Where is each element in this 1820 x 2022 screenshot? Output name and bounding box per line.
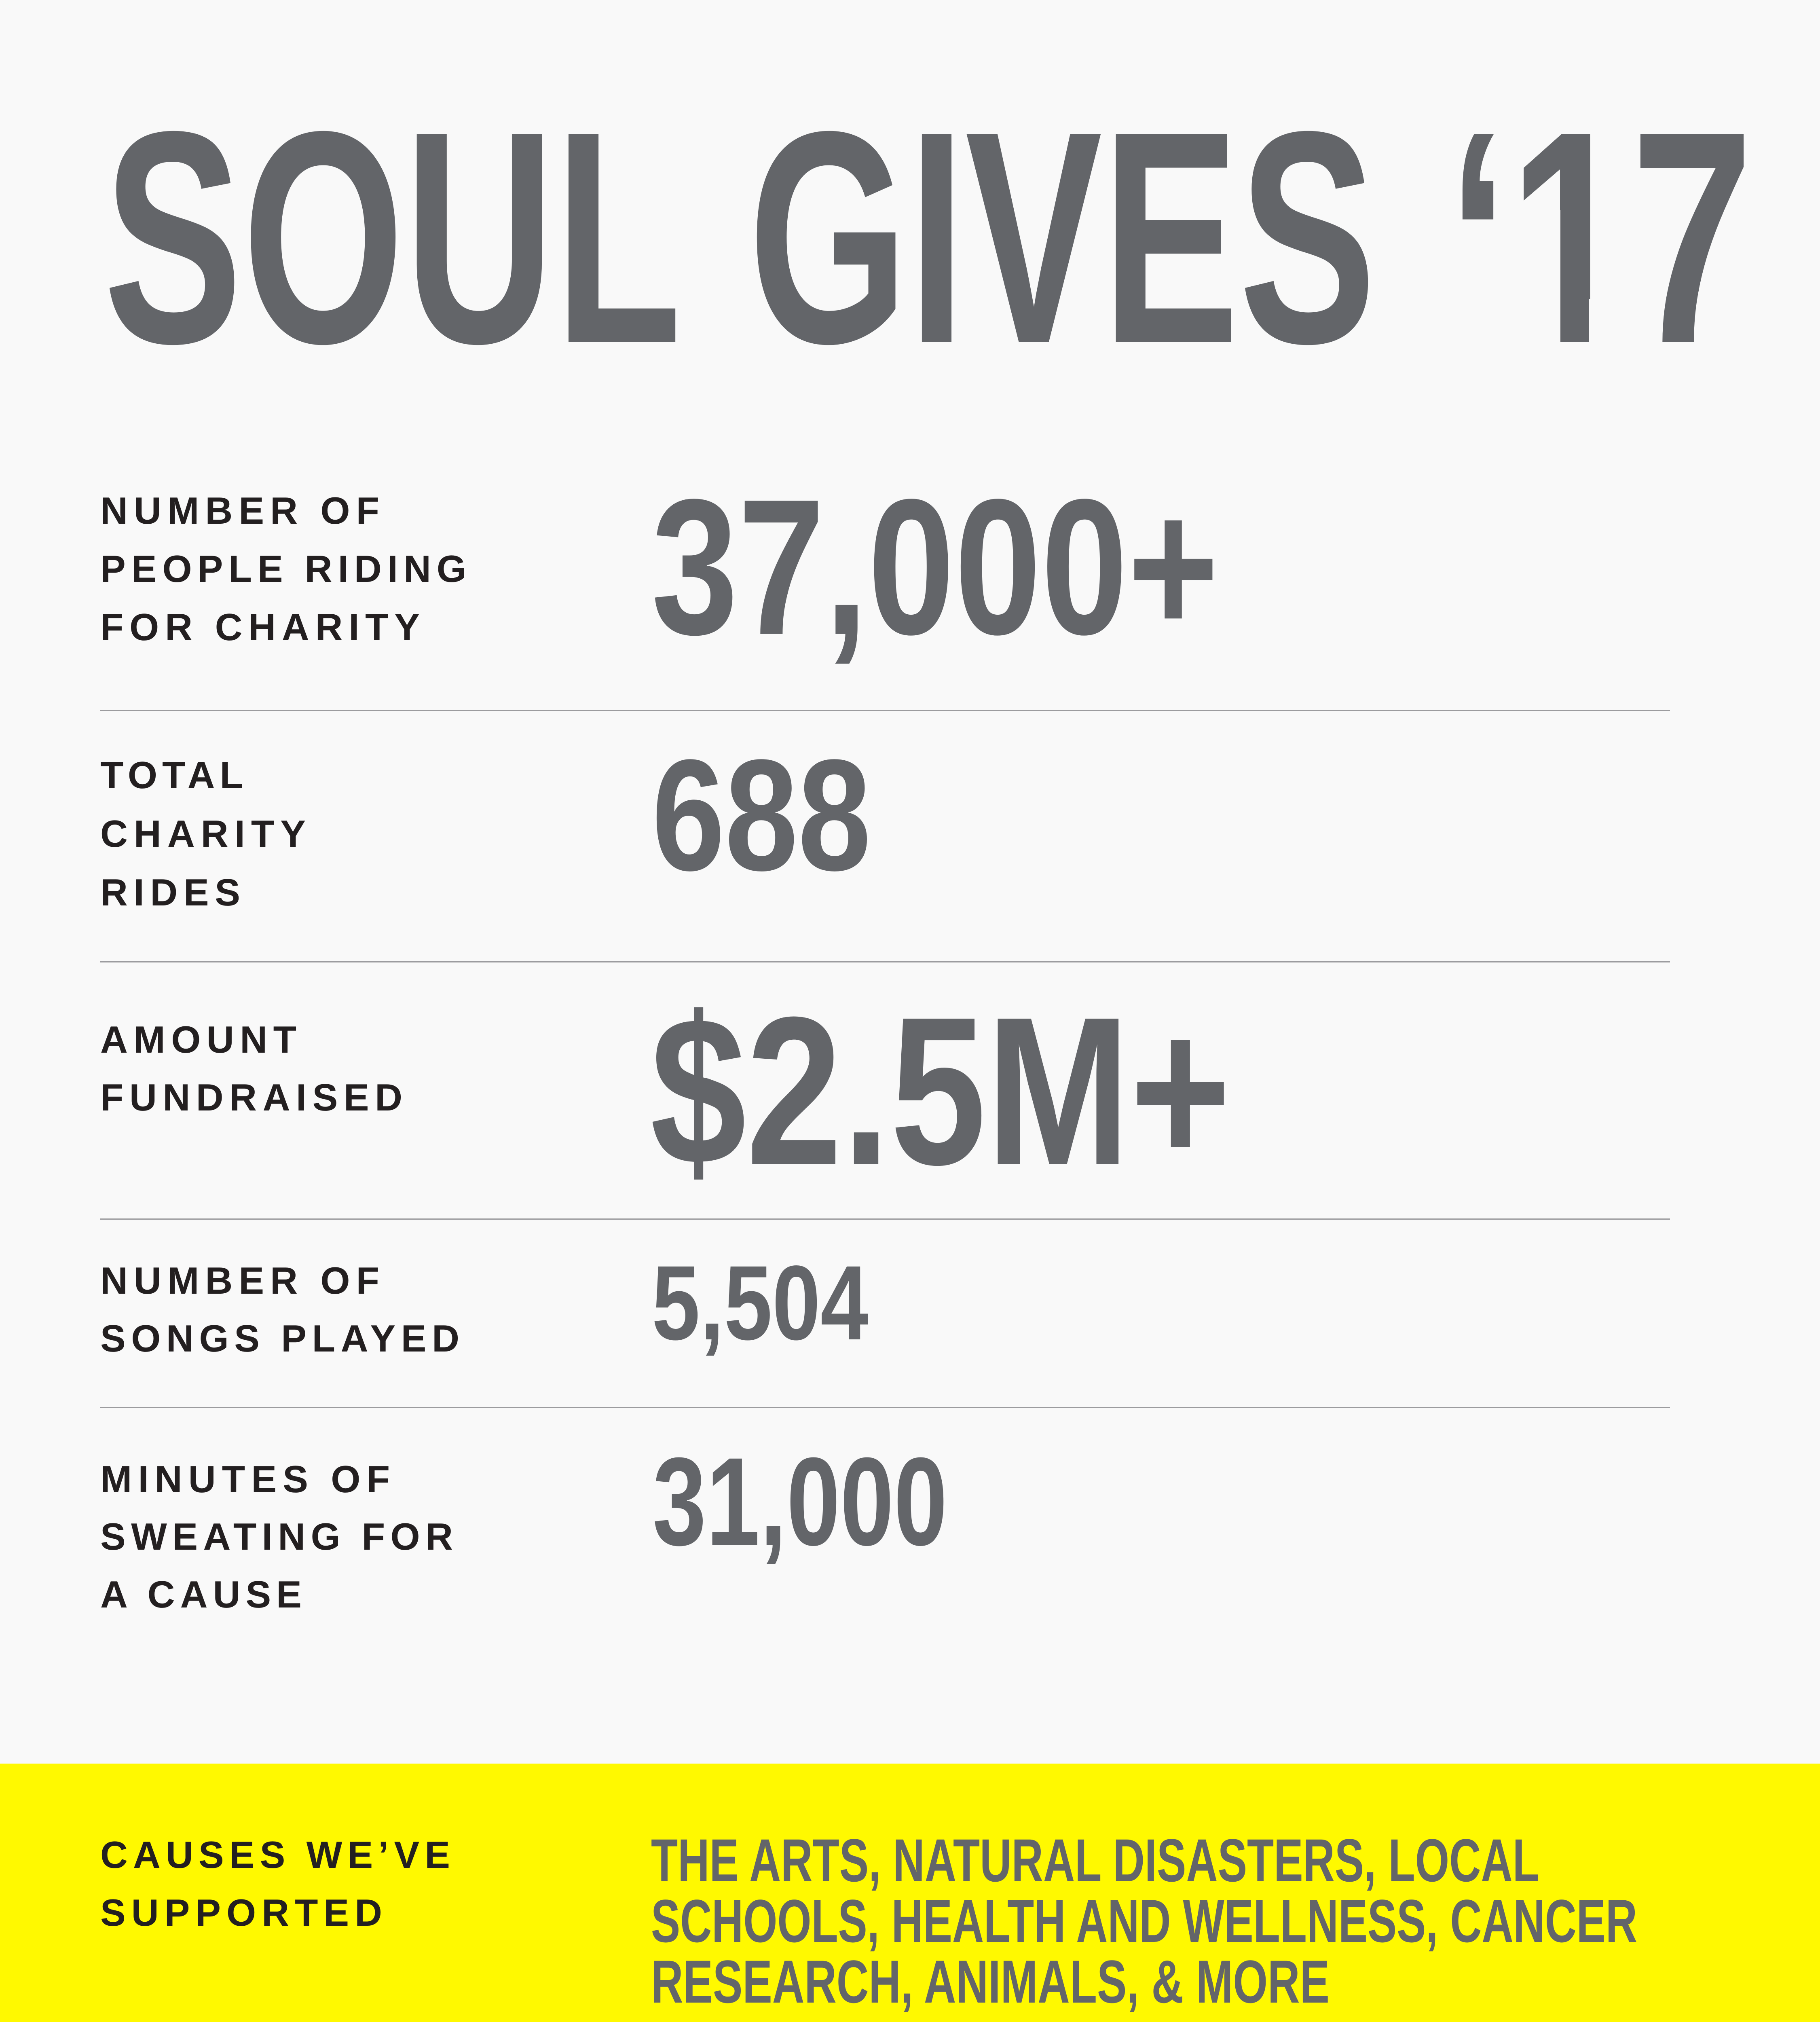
label: total rides: CHARITY	[100, 812, 306, 855]
value: 37,000+: 37,000+	[651, 459, 1219, 675]
label: people riding: PEOPLE RIDING	[100, 548, 466, 590]
label: songs played: SONGS PLAYED	[100, 1317, 459, 1360]
value: 688: 688	[652, 727, 871, 904]
label: people riding: NUMBER OF	[100, 489, 379, 532]
title	[104, 68, 1753, 406]
label: amount fundraised: FUNDRAISED	[100, 1076, 402, 1119]
row: people riding	[100, 459, 1219, 675]
causes list	[651, 1826, 1637, 2016]
value: 31,000: 31,000	[653, 1431, 947, 1571]
label: total rides: TOTAL	[100, 754, 243, 796]
row: songs played	[100, 1244, 869, 1362]
label: total rides	[100, 754, 306, 914]
label: causes: CAUSES WE’VE	[100, 1834, 450, 1876]
row: total rides	[100, 727, 871, 914]
label: minutes sweating: SWEATING FOR	[100, 1515, 453, 1558]
row: amount fundraised	[100, 973, 1231, 1209]
label: amount fundraised: AMOUNT	[100, 1018, 296, 1061]
label: people riding	[100, 489, 466, 648]
label: causes	[100, 1834, 450, 1934]
label: total rides: RIDES	[100, 871, 240, 914]
label: minutes sweating: A CAUSE	[100, 1573, 302, 1616]
label: songs played: NUMBER OF	[100, 1259, 379, 1302]
label: minutes sweating: MINUTES OF	[100, 1458, 390, 1500]
label: amount fundraised	[100, 1018, 402, 1119]
label: people riding: FOR CHARITY	[100, 606, 420, 648]
value: 5,504: 5,504	[652, 1244, 869, 1362]
row: minutes sweating	[100, 1431, 947, 1616]
causes list: RESEARCH, ANIMALS, & MORE	[651, 1948, 1330, 2016]
title: SOUL	[104, 68, 682, 406]
label: causes: SUPPORTED	[100, 1891, 382, 1934]
label: minutes sweating	[100, 1458, 453, 1616]
title: GIVES	[748, 68, 1376, 406]
value: $2.5M+: $2.5M+	[650, 973, 1231, 1209]
panel: causes supported	[0, 1764, 1820, 2022]
label: songs played	[100, 1259, 459, 1360]
